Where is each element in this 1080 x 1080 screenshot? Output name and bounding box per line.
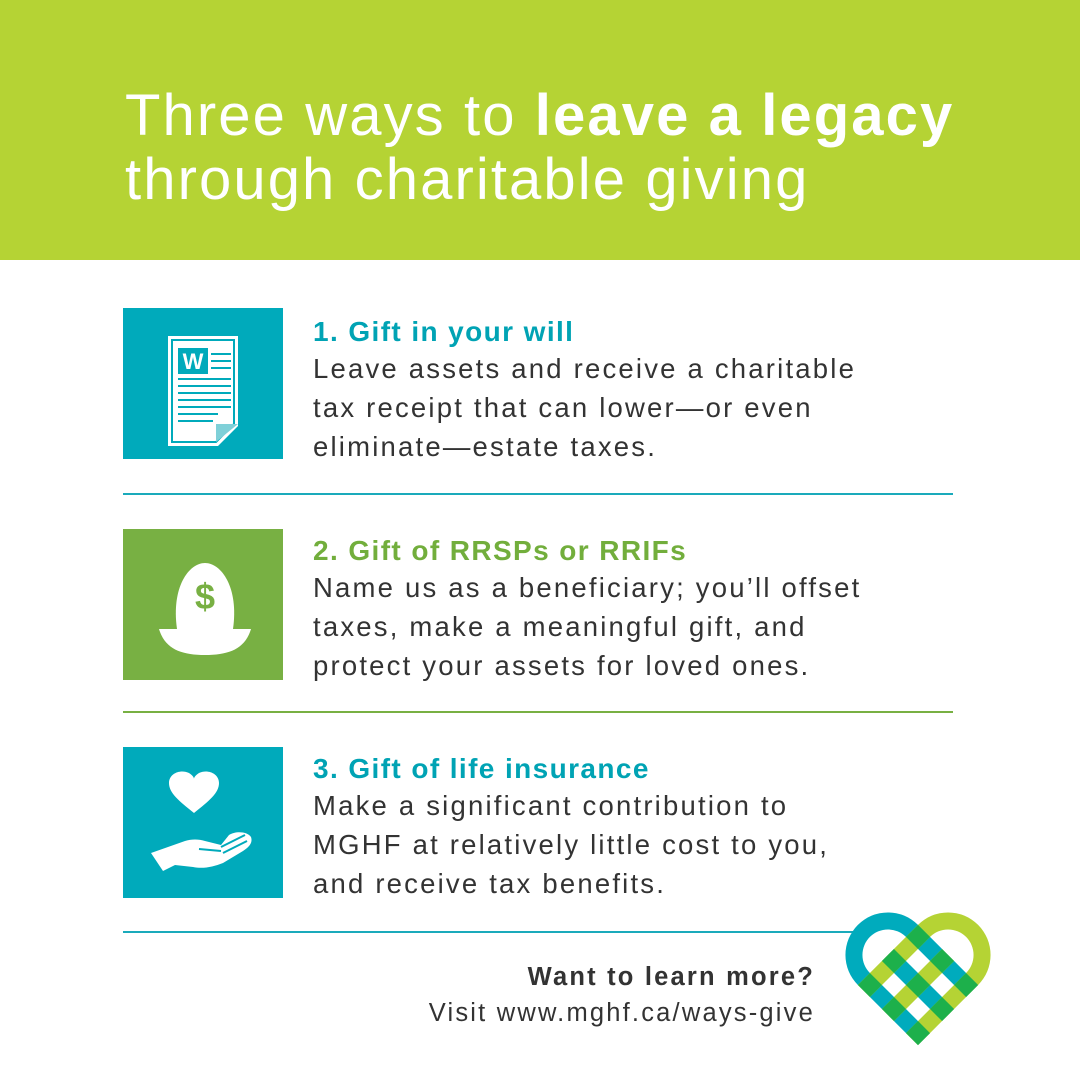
icon: hand with heart [123,747,283,898]
title [125,83,954,212]
footer call to action: Want to learn more? [528,963,815,991]
item 3 text: MGHF at relatively little cost to you, [313,829,829,860]
item 1 text [313,316,856,462]
footer call to action: Visit www.mghf.ca/ways-give [429,999,815,1027]
footer call to action [428,963,815,1027]
item 1 text: 1. Gift in your will [313,316,574,347]
header banner [0,0,1080,260]
item 2 text [313,535,861,681]
icon: will document [123,308,283,459]
item 3 text: and receive tax benefits. [313,868,666,899]
title: through charitable giving [125,147,809,212]
icon: nest egg [123,529,283,680]
item 2 text: protect your assets for loved ones. [313,650,810,681]
item 3 text: 3. Gift of life insurance [313,753,650,784]
item 3 text [313,753,829,899]
item 1 text: Leave assets and receive a charitable [313,353,856,384]
logo: woven heart [845,912,991,1046]
icon: will document: W [183,349,204,374]
icon: nest egg: $ [195,576,215,617]
item 1 text: tax receipt that can lower—or even [313,392,813,423]
item 2 text: taxes, make a meaningful gift, and [313,611,807,642]
item 2 text: 2. Gift of RRSPs or RRIFs [313,535,687,566]
item 1 text: eliminate—estate taxes. [313,431,657,462]
item 3 text: Make a significant contribution to [313,790,788,821]
item 2 text: Name us as a beneficiary; you’ll offset [313,572,861,603]
title: Three ways to leave a legacy [125,83,954,148]
